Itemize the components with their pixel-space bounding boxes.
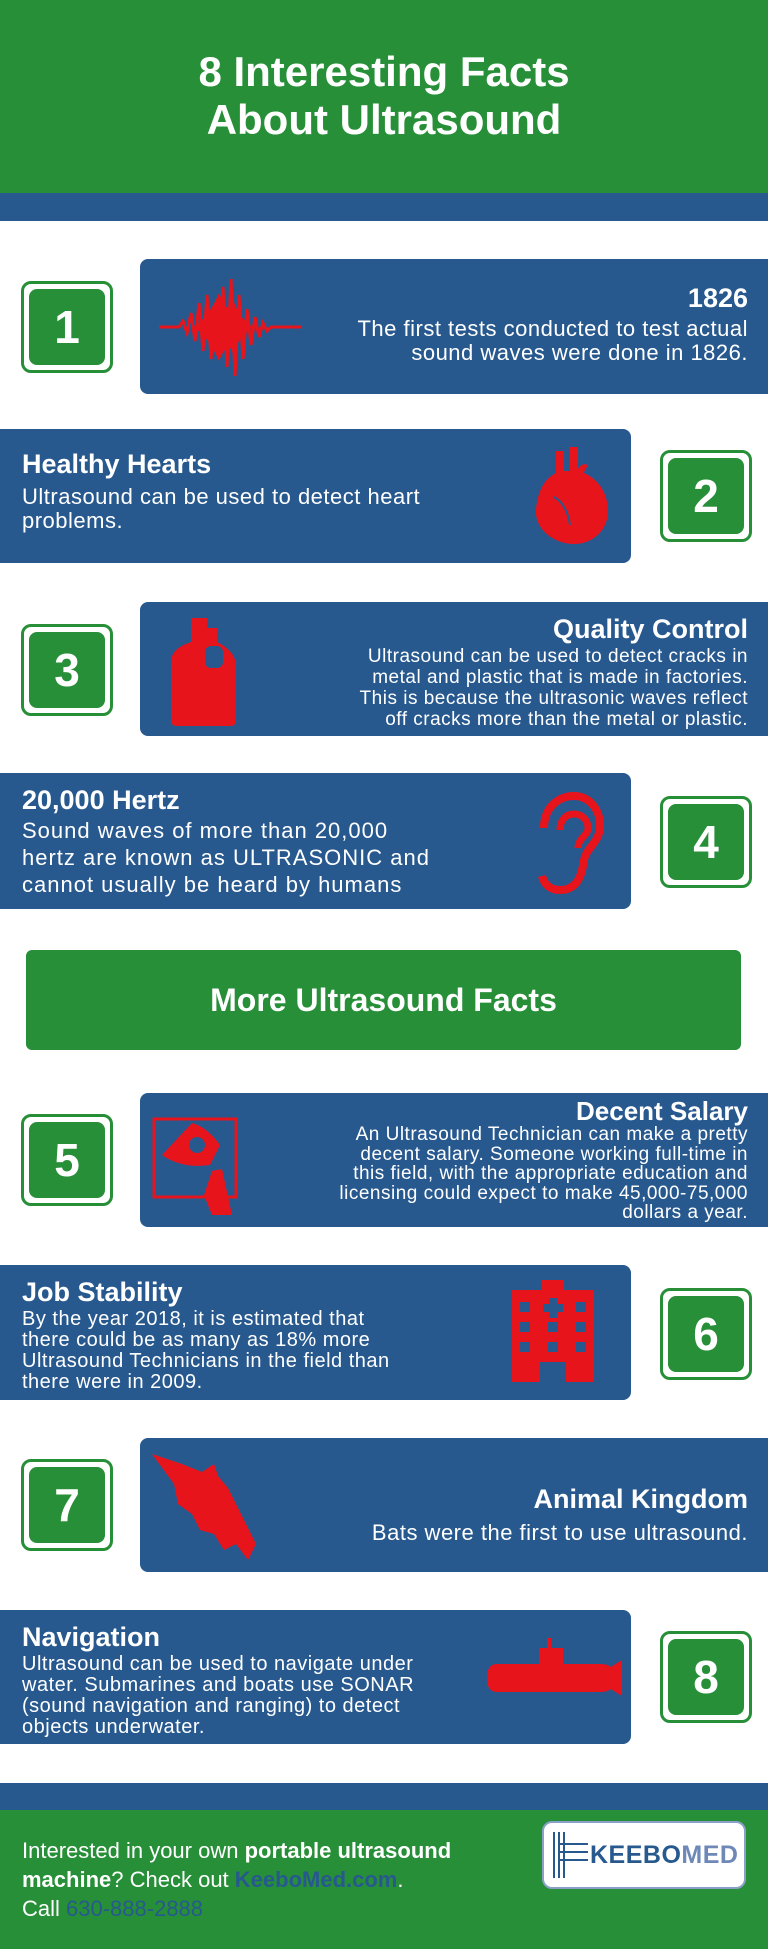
text	[357, 316, 748, 365]
number 5	[21, 1114, 113, 1206]
number 1	[21, 281, 113, 373]
text: licensing could expect to make 45,000-75,000	[339, 1182, 748, 1204]
number 3: 3	[54, 644, 80, 696]
text	[22, 818, 430, 897]
heading: Quality Control	[553, 614, 748, 644]
text: Ultrasound Technicians in the field than	[22, 1350, 390, 1372]
heading: 1826: 1826	[688, 283, 748, 313]
icon: submarine	[487, 1638, 622, 1696]
number 2: 2	[693, 470, 719, 522]
heading: Healthy Hearts	[22, 449, 211, 479]
number 7: 7	[54, 1479, 80, 1531]
panel: fact 2	[0, 429, 631, 563]
text: there were in 2009.	[22, 1371, 203, 1393]
text: water. Submarines and boats use SONAR	[22, 1674, 414, 1696]
text: problems.	[22, 508, 123, 533]
text: Bats were the first to use ultrasound.	[372, 1520, 748, 1545]
number 4	[660, 796, 752, 888]
panel: fact 7	[140, 1438, 768, 1572]
text	[22, 1308, 390, 1393]
footer text	[22, 1838, 451, 1921]
text: The first tests conducted to test actual	[357, 316, 748, 341]
text: hertz are known as ULTRASONIC and	[22, 845, 430, 870]
title: About Ultrasound	[207, 96, 561, 143]
footer text: Call 630-888-2888	[22, 1896, 203, 1921]
panel: fact 3	[140, 602, 768, 736]
number 1: 1	[54, 301, 80, 353]
panel: fact 1	[140, 259, 768, 394]
number 5: 5	[54, 1134, 80, 1186]
number 7	[21, 1459, 113, 1551]
heading: 20,000 Hertz	[22, 785, 180, 815]
text: cannot usually be heard by humans	[22, 872, 402, 897]
footer	[0, 1810, 768, 1949]
title: 8 Interesting Facts	[198, 48, 570, 95]
footer text: machine? Check out KeeboMed.com.	[22, 1867, 404, 1892]
text: objects underwater.	[22, 1716, 205, 1738]
text: Ultrasound can be used to navigate under	[22, 1653, 413, 1675]
panel: fact 5	[140, 1093, 768, 1227]
text	[360, 646, 748, 730]
icon: heart	[536, 447, 608, 544]
panel: fact 4	[0, 773, 631, 909]
text: An Ultrasound Technician can make a pretty	[356, 1124, 748, 1145]
number 4: 4	[693, 816, 719, 868]
text: dollars a year.	[622, 1202, 748, 1223]
banner: More Ultrasound Facts	[26, 950, 741, 1050]
icon: jug	[171, 618, 236, 726]
icon: hospital building	[512, 1280, 594, 1382]
text: Ultrasound can be used to detect cracks in	[368, 646, 748, 667]
text: decent salary. Someone working full-time in	[360, 1144, 748, 1164]
text	[339, 1124, 748, 1223]
text: there could be as many as 18% more	[22, 1329, 370, 1351]
heading: Animal Kingdom	[534, 1484, 748, 1514]
panel: fact 8	[0, 1610, 631, 1744]
heading: Navigation	[22, 1622, 160, 1652]
footer text: Interested in your own portable ultrasound	[22, 1838, 451, 1863]
text: (sound navigation and ranging) to detect	[22, 1695, 400, 1717]
text: off cracks more than the metal or plastic.	[385, 709, 748, 730]
icon: ultrasound screen	[152, 1118, 238, 1215]
icon: sound wave	[159, 279, 302, 376]
heading: Job Stability	[22, 1277, 183, 1307]
icon: bat	[152, 1454, 256, 1560]
panel: fact 6	[0, 1265, 631, 1400]
text	[22, 1653, 414, 1738]
text: Sound waves of more than 20,000	[22, 818, 388, 843]
number 2	[660, 450, 752, 542]
text: This is because the ultrasonic waves reflect	[360, 688, 748, 709]
text: By the year 2018, it is estimated that	[22, 1308, 365, 1330]
title	[198, 48, 570, 143]
text: this field, with the appropriate education and	[353, 1163, 748, 1184]
logo: KeeboMed	[542, 1821, 746, 1889]
banner: More Ultrasound Facts: More Ultrasound Facts	[210, 982, 557, 1018]
logo: KeeboMed: KEEBOMED	[590, 1840, 738, 1868]
text: Ultrasound can be used to detect heart	[22, 484, 420, 509]
number 8: 8	[693, 1651, 719, 1703]
icon: ear	[538, 792, 604, 894]
number 8	[660, 1631, 752, 1723]
number 6	[660, 1288, 752, 1380]
heading: Decent Salary	[576, 1096, 748, 1126]
text: metal and plastic that is made in factories.	[372, 667, 748, 688]
header	[0, 0, 768, 193]
number 6: 6	[693, 1308, 719, 1360]
text: sound waves were done in 1826.	[411, 340, 748, 365]
text	[22, 484, 420, 533]
number 3	[21, 624, 113, 716]
